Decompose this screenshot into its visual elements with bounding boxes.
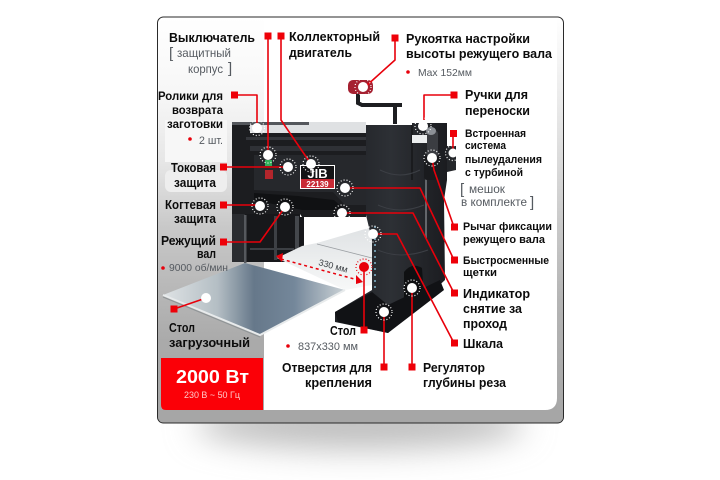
labels: bottom centre: крепления — [305, 376, 372, 390]
width dimension arrow: 330 мм — [317, 257, 349, 275]
labels: right column: Индикатор — [463, 287, 530, 301]
machine: head — [232, 125, 366, 217]
labels: right column: снятие за — [463, 302, 523, 316]
labels: left column: Стол — [169, 321, 195, 335]
labels: left column: заготовки — [167, 117, 223, 131]
labels: left column: защита — [174, 176, 217, 190]
machine: top silver roller — [250, 122, 366, 133]
labels: right column: Быстросменные — [463, 255, 549, 267]
labels: left column: загрузочный — [169, 335, 250, 350]
labels: right column — [460, 88, 552, 351]
labels: left column: Ролики для — [158, 89, 223, 103]
callout square markers — [170, 32, 458, 370]
labels: left column: защита — [174, 212, 217, 226]
labels: top centre — [289, 30, 553, 79]
labels: left column: возврата — [172, 103, 223, 117]
labels: bottom centre: 837x330 мм — [298, 341, 358, 353]
labels: right column: в комплекте — [461, 195, 527, 209]
labels: left column: вал — [197, 247, 216, 261]
labels: left column: Токовая — [171, 161, 216, 175]
machine: switch — [265, 160, 272, 166]
labels: right column: Шкала — [463, 337, 504, 351]
machine: right column — [335, 123, 447, 333]
machine: brand plate: 22139 — [306, 180, 329, 189]
machine: height handle — [358, 93, 402, 105]
power badge — [161, 358, 263, 410]
labels: right column: переноски — [465, 104, 530, 118]
labels: right column: Ручки для — [465, 88, 528, 102]
labels: right column: щетки — [463, 267, 497, 279]
labels: right column: мешок — [469, 182, 506, 196]
card shadow — [195, 401, 525, 449]
labels: top centre: Max 152мм — [418, 67, 472, 79]
labels: top centre: Рукоятка настройки — [406, 32, 530, 46]
callout circle markers — [201, 79, 460, 320]
labels: left column: Выключатель — [169, 30, 255, 45]
labels: left column — [158, 30, 255, 350]
labels: bottom centre: Регулятор — [423, 361, 485, 375]
labels: left column: Режущий — [161, 234, 216, 248]
labels: left column: [ — [169, 45, 174, 62]
machine: rear top and dust port — [412, 135, 427, 143]
machine: infeed table — [163, 263, 345, 335]
labels: right column: режущего вала — [463, 234, 546, 246]
labels: right column: Встроенная — [465, 128, 526, 140]
labels: left column: 2 шт. — [199, 135, 223, 147]
labels: bottom centre: Стол — [330, 324, 356, 338]
power badge: 2000 Вт — [176, 366, 249, 387]
labels: left column: ] — [228, 60, 232, 77]
callout lines — [174, 36, 454, 367]
labels: right column: пылеудаления — [465, 154, 542, 166]
machine: brand plate: JIB — [307, 166, 328, 181]
power badge: 230 В ~ 50 Гц — [184, 390, 241, 401]
labels: bottom centre — [282, 324, 507, 390]
card panel — [158, 17, 564, 423]
planer machine — [163, 80, 456, 337]
labels: right column: Рычаг фиксации — [463, 221, 552, 233]
width dimension arrow — [276, 253, 363, 284]
machine: back interior and legs — [232, 123, 304, 262]
labels: top centre: Коллекторный — [289, 30, 380, 44]
machine: brand plate — [300, 165, 335, 189]
labels: left column: корпус — [188, 62, 223, 76]
labels: bottom centre: глубины реза — [423, 376, 507, 390]
labels: left column: 9000 об/мин — [169, 262, 228, 274]
labels: top centre: высоты режущего вала — [406, 47, 553, 61]
labels: left column: Когтевая — [165, 198, 216, 212]
labels: right column: [ — [460, 181, 465, 198]
labels: bottom centre: Отверстия для — [282, 361, 372, 375]
labels: right column: проход — [463, 317, 507, 331]
labels: top centre: двигатель — [289, 46, 352, 60]
labels: right column: с турбиной — [465, 167, 523, 179]
labels: right column: система — [465, 140, 507, 152]
labels: right column: ] — [530, 194, 534, 211]
machine: outfeed bed — [277, 217, 372, 290]
labels: left column: защитный — [177, 46, 231, 60]
